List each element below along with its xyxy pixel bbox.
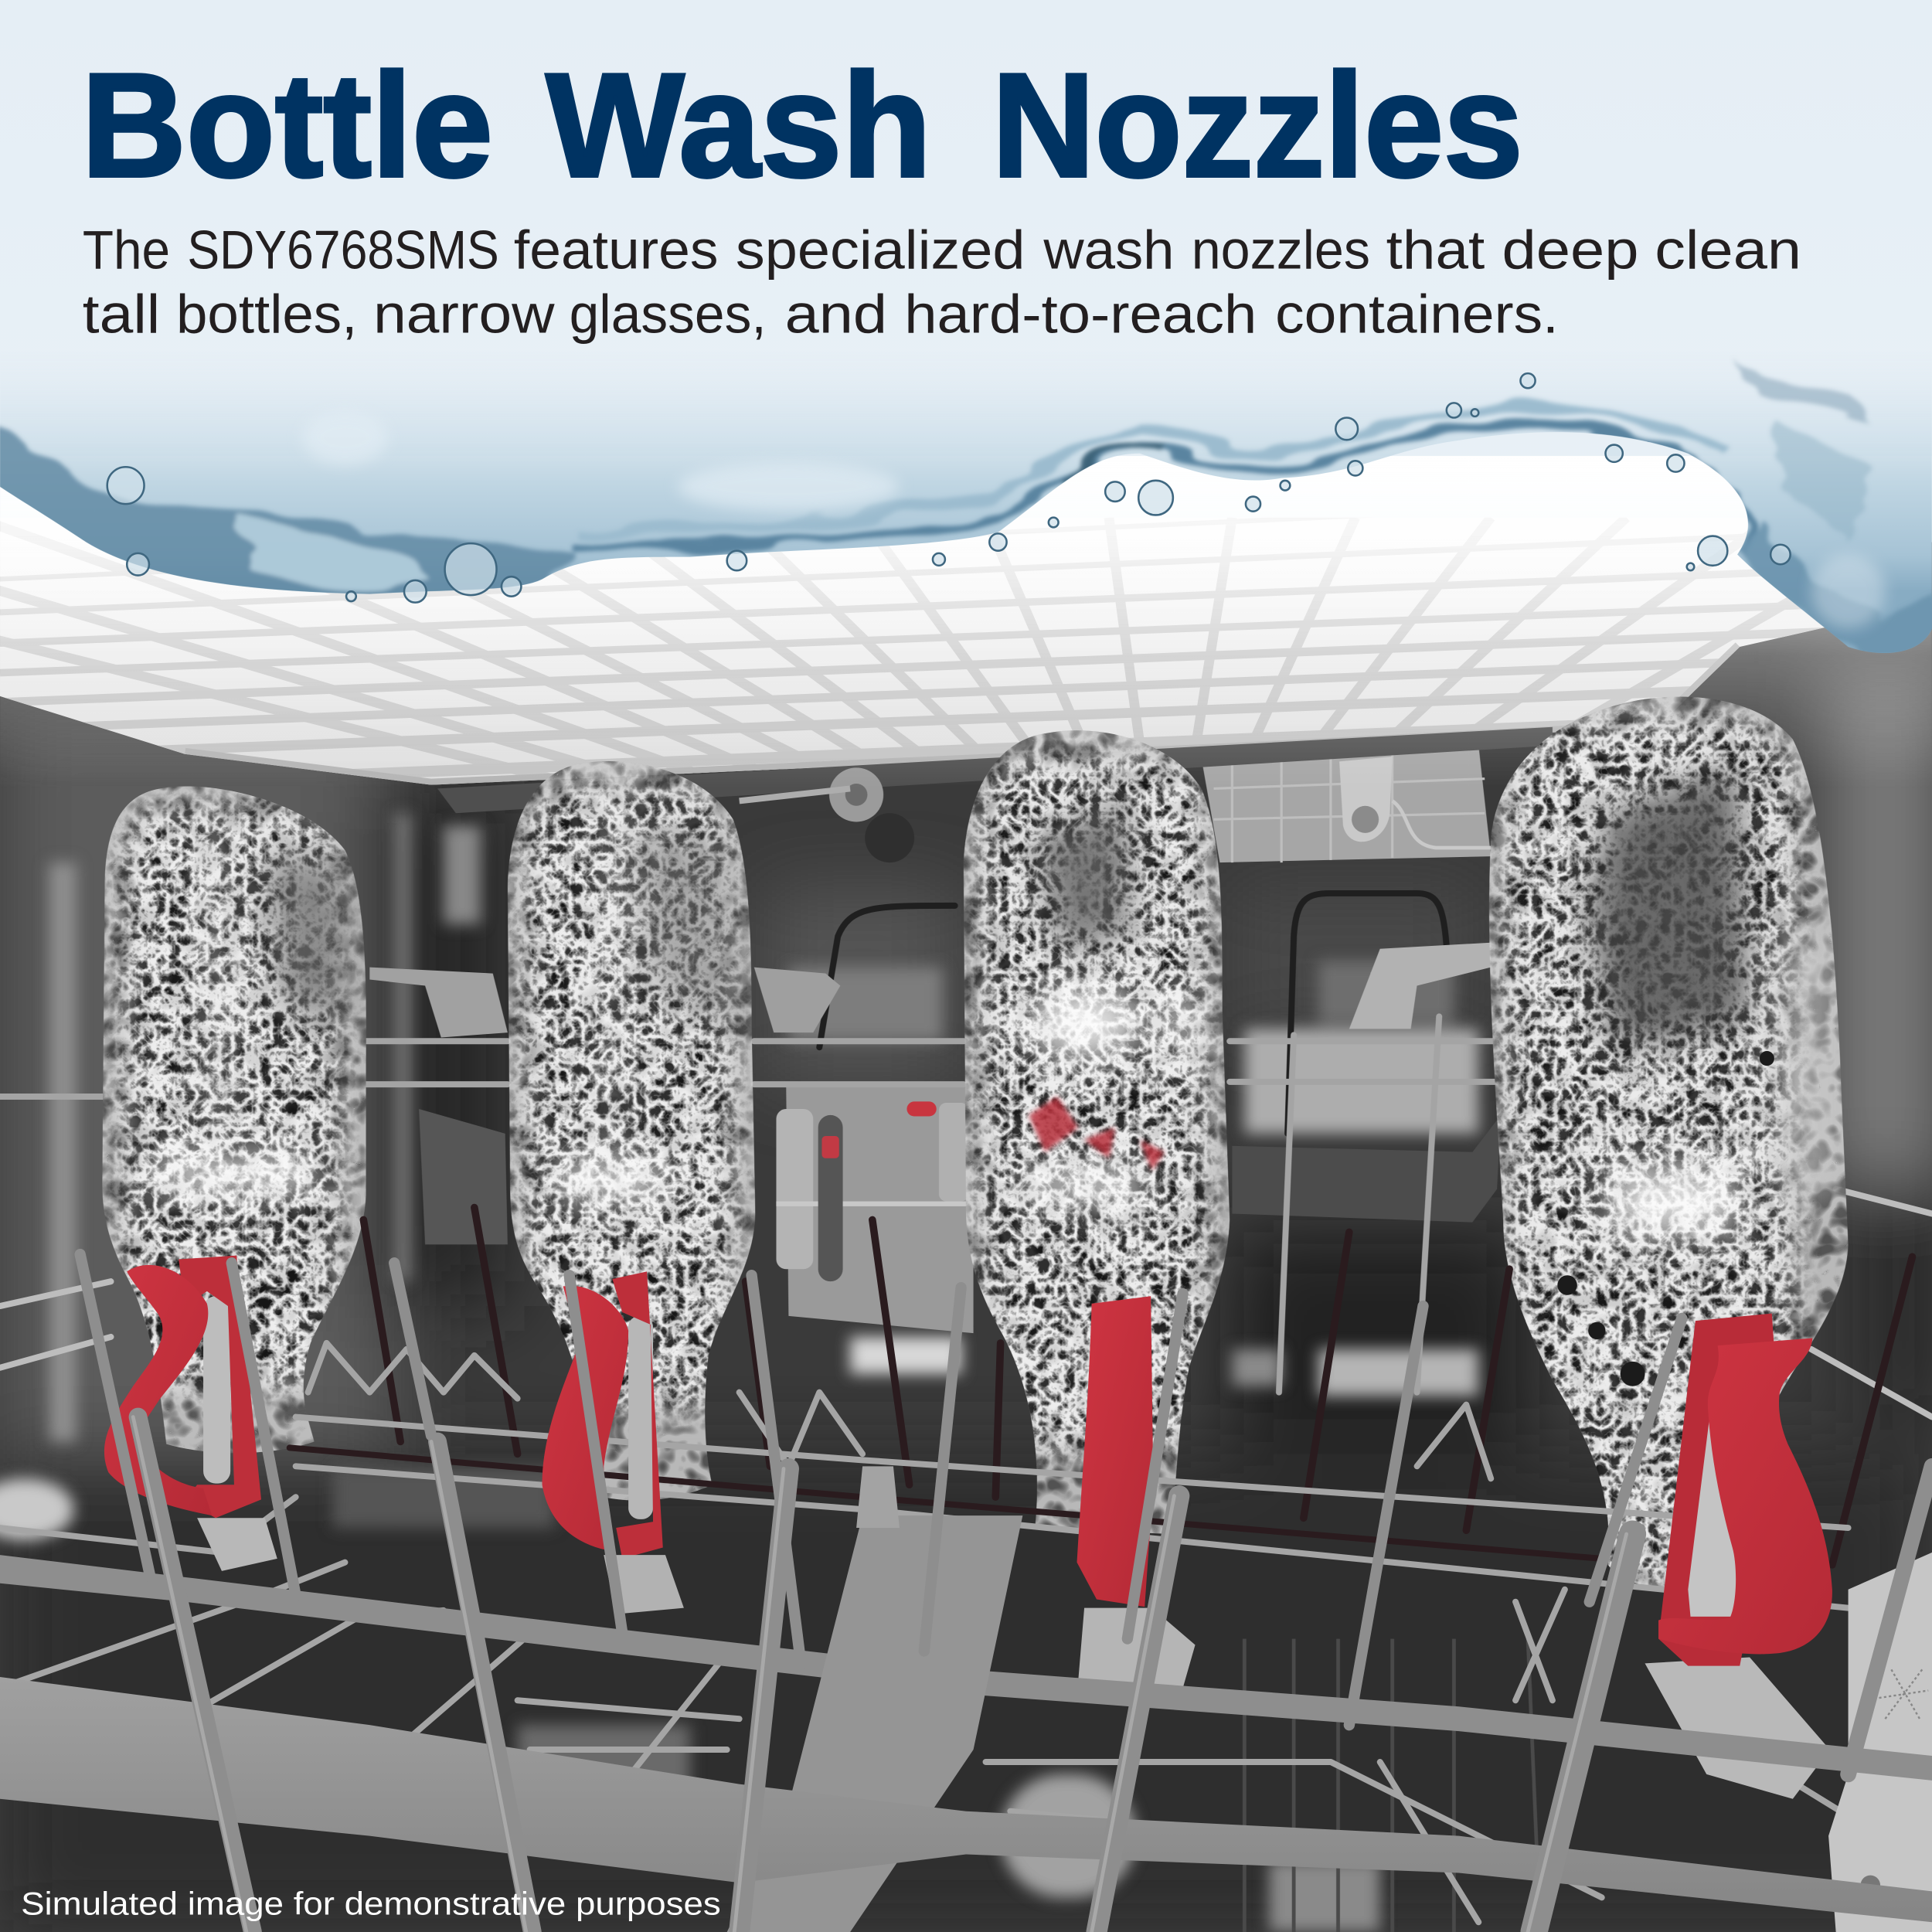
- description line 1: The: [83, 219, 170, 281]
- rail strip: [437, 727, 1553, 813]
- description line 2: tall: [83, 283, 160, 344]
- bracket: [1339, 757, 1491, 848]
- rack side panel with snowflake: [1828, 1553, 1932, 1932]
- mount: [604, 1555, 684, 1614]
- spray bracket mid: [754, 968, 840, 1032]
- center tray: [727, 1515, 1022, 1932]
- description line 1: wash: [1043, 219, 1174, 281]
- dark pool and edge streaks: [0, 363, 1932, 662]
- spray bracket left: [369, 968, 508, 1037]
- top rack underside grid: [0, 521, 1825, 785]
- hook: [104, 1265, 212, 1515]
- nozzle 1 red clip: [104, 1256, 277, 1571]
- water splash: [0, 332, 1932, 665]
- description line 1: features: [514, 219, 719, 281]
- description line 2: glasses,: [570, 283, 767, 344]
- description line 2: bottles,: [176, 283, 357, 344]
- description line 2: hard-to-reach: [904, 283, 1257, 344]
- mount: [197, 1518, 277, 1571]
- dishwasher interior background: [0, 543, 1932, 1932]
- description: [83, 219, 1801, 344]
- mount: [1078, 1608, 1196, 1688]
- hook: [1077, 1296, 1153, 1607]
- bottle 1: [93, 776, 376, 1466]
- description line 1: nozzles: [1192, 219, 1370, 281]
- water highlights: [302, 410, 1885, 628]
- description line 1: that: [1386, 219, 1485, 281]
- holder: [1658, 1314, 1774, 1666]
- nozzle 3 red clip: [1077, 1296, 1196, 1688]
- bottle 2: [499, 752, 764, 1515]
- description line 2: containers.: [1275, 283, 1559, 344]
- description line 1: deep: [1502, 219, 1639, 281]
- mount: [1645, 1657, 1830, 1799]
- hook: [543, 1286, 628, 1550]
- lower rack wires: [0, 1343, 1932, 1922]
- wheel: [740, 767, 914, 862]
- hook: [1658, 1338, 1832, 1654]
- title: Wash: [546, 43, 931, 208]
- water body: [0, 396, 1932, 653]
- white fade over the rack: [0, 456, 1932, 788]
- description line 1: SDY6768SMS: [187, 219, 499, 281]
- foreground tines: [80, 1254, 1932, 1932]
- spray tube: [1688, 1393, 1740, 1617]
- dispenser panel: [776, 1084, 974, 1333]
- lattice panel: [1202, 746, 1491, 862]
- description line 1: clean: [1655, 219, 1801, 281]
- spray tube: [628, 1316, 653, 1519]
- center clip: [856, 1466, 900, 1528]
- title: Bottle: [81, 43, 493, 208]
- slide rail left: [419, 1109, 508, 1244]
- title: Nozzles: [992, 43, 1523, 208]
- nozzle 4 red clip: [1645, 1314, 1832, 1799]
- holder: [179, 1256, 261, 1518]
- holder: [612, 1271, 663, 1559]
- rear wall hardware: [369, 727, 1553, 1333]
- footnote: Simulated image for demonstrative purposes: [21, 1886, 721, 1922]
- description line 1: specialized: [736, 219, 1026, 281]
- bottle 4: [1478, 684, 1855, 1602]
- spray tube: [203, 1296, 230, 1484]
- description line 2: narrow: [373, 283, 555, 344]
- bottle 3: [955, 721, 1238, 1546]
- spray bracket right: [1349, 943, 1491, 1029]
- slide rail right: [1232, 1115, 1501, 1223]
- back rail: [0, 1555, 1932, 1781]
- water bubbles: [107, 373, 1791, 603]
- nozzle 2 red clip: [543, 1271, 684, 1614]
- front rail: [0, 1677, 1932, 1922]
- description line 2: and: [785, 283, 887, 344]
- main rack rails: [0, 1466, 1932, 1932]
- upper wires behind bottles: [0, 1016, 1932, 1417]
- dark dishwasher tines: [290, 1207, 1912, 1565]
- arch wires: [819, 893, 1447, 1134]
